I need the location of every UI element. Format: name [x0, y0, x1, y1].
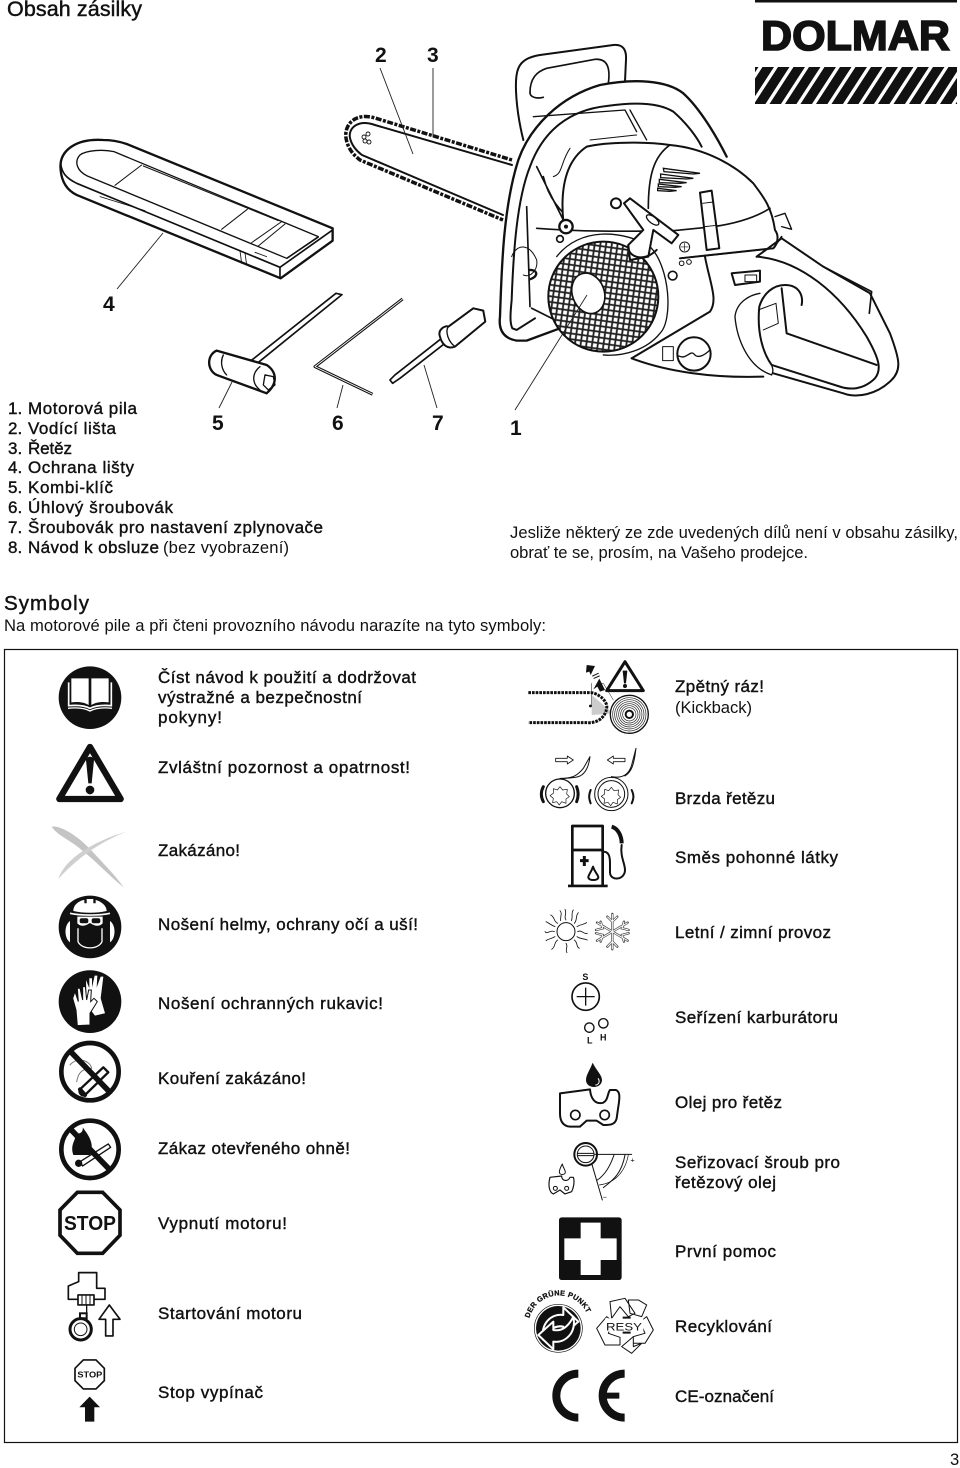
lower body	[632, 257, 714, 358]
rear handle	[757, 238, 898, 395]
icon: carburettor adjustment: H	[600, 1033, 606, 1043]
subheading: Na motorové pile a při čteni provozního návodu narazíte na tyto symboly:	[4, 616, 546, 635]
labels right column: Zpětný ráz!	[675, 677, 764, 696]
parts list: Řetěz	[28, 439, 72, 458]
icon: carburettor adjustment: L	[587, 1035, 593, 1045]
icon: summer and winter	[545, 909, 629, 953]
labels left column	[158, 668, 418, 1402]
callout numbers: 5	[212, 412, 224, 435]
icon: oil adjustment screw: +	[630, 1156, 635, 1165]
parts list: 3.	[8, 439, 22, 458]
icon: warning triangle	[59, 747, 121, 799]
parts list: 8.	[8, 538, 22, 557]
icon: resy recycling: RESY	[606, 1322, 643, 1334]
icon: resy recycling	[597, 1298, 653, 1353]
icon: carburettor adjustment: S	[582, 972, 588, 982]
callout numbers	[103, 44, 587, 440]
icon: oil adjustment screw: −	[603, 1192, 607, 1201]
labels left column: Zákaz otevřeného ohně!	[158, 1139, 350, 1158]
icon: chain oil	[560, 1063, 619, 1127]
labels right column: Seřízení karburátoru	[675, 1008, 838, 1027]
logo: DOLMAR	[755, 0, 957, 104]
labels left column: Startování motoru	[158, 1304, 302, 1323]
labels right column: Olej pro řetěz	[675, 1093, 782, 1112]
icon: combination wrench	[209, 293, 342, 393]
icon: ce mark	[556, 1374, 625, 1418]
parts list: Kombi-klíč	[28, 478, 114, 497]
icon: first aid	[559, 1217, 622, 1280]
icon: stop switch: STOP	[77, 1370, 103, 1380]
callout numbers: 3	[427, 44, 439, 67]
panel: symbols	[4, 648, 958, 1444]
labels left column: pokyny!	[158, 708, 222, 727]
parts list: Úhlový šroubovák	[28, 498, 174, 517]
labels right column: (Kickback)	[675, 698, 752, 717]
labels right column: První pomoc	[675, 1242, 776, 1261]
logo: DOLMAR: DOLMAR	[761, 12, 950, 59]
icon: carburettor screwdriver	[390, 308, 485, 383]
labels left column: výstražné a bezpečnostní	[158, 688, 362, 707]
note: Jesliže některý ze zde uvedených dílů není v obsahu zásilky,	[510, 523, 958, 542]
labels right column: Letní / zimní provoz	[675, 923, 831, 942]
parts list: (bez vyobrazení)	[163, 538, 289, 557]
labels left column: Kouření zakázáno!	[158, 1069, 306, 1088]
icon: der grüne punkt	[524, 1290, 592, 1353]
icons left column, upper	[52, 666, 126, 1033]
labels right column	[675, 677, 840, 1406]
icons right column, upper	[528, 662, 648, 1045]
parts list	[8, 399, 323, 557]
note: obrať te se, prosím, na Vašeho prodejce.	[510, 543, 808, 562]
labels left column: Nošení helmy, ochrany očí a uší!	[158, 915, 418, 934]
labels right column: CE-označení	[675, 1387, 774, 1406]
parts list: 1.	[8, 399, 22, 418]
icon: helmet and protection	[59, 896, 121, 958]
icons left column, lower	[60, 1043, 120, 1422]
parts list: 5.	[8, 478, 22, 497]
parts list: 4.	[8, 458, 22, 477]
icon: kickback	[528, 662, 648, 733]
parts list: 6.	[8, 498, 22, 517]
engine cover	[563, 143, 778, 258]
labels left column: Vypnutí motoru!	[158, 1214, 287, 1233]
parts list: Motorová pila	[28, 399, 138, 418]
labels right column: Recyklování	[675, 1317, 772, 1336]
fuel cap	[677, 337, 711, 371]
callout numbers: 1	[510, 417, 522, 440]
icons right column, lower	[524, 1062, 654, 1422]
icon: gloves	[59, 970, 121, 1033]
icon: scabbard	[60, 140, 333, 278]
heading: Symboly: Symboly	[4, 592, 90, 615]
starter mesh	[548, 242, 658, 352]
icon: stop switch	[75, 1360, 104, 1422]
parts list: Návod k obsluze	[28, 538, 159, 557]
callout numbers: 6	[332, 412, 344, 435]
icon: no smoking	[61, 1043, 119, 1100]
note	[510, 523, 958, 562]
parts list: Vodící lišta	[28, 419, 117, 438]
icon: prohibited cross	[52, 826, 126, 888]
labels right column: Seřizovací šroub pro	[675, 1153, 840, 1172]
labels right column: Brzda řetězu	[675, 789, 775, 808]
handlebar	[500, 81, 727, 341]
parts list: 2.	[8, 419, 22, 438]
callout numbers: 2	[375, 44, 387, 67]
labels left column: Zakázáno!	[158, 841, 240, 860]
starter handle	[624, 198, 678, 260]
labels left column: Stop vypínač	[158, 1383, 264, 1402]
icon: no open flame	[61, 1121, 119, 1178]
labels right column: Směs pohonné látky	[675, 848, 838, 867]
labels right column: řetězový olej	[675, 1173, 776, 1192]
icon: carburettor adjustment	[572, 972, 608, 1045]
icon: stop sign: STOP	[64, 1212, 116, 1235]
icon: chain brake	[541, 748, 636, 811]
labels left column: Zvláštní pozornost a opatrnost!	[158, 758, 410, 777]
parts list: 7.	[8, 518, 22, 537]
icon: starting engine	[68, 1273, 120, 1340]
callout numbers: 7	[432, 412, 444, 435]
icon: angled screwdriver	[315, 299, 403, 394]
icon: stop sign	[60, 1192, 120, 1253]
icon: chain guide bar and saw chain	[346, 116, 512, 220]
icon: chainsaw body	[500, 45, 898, 395]
callout numbers: 4	[103, 293, 115, 316]
parts list: Ochrana lišty	[28, 458, 134, 477]
icon: read manual	[59, 666, 121, 729]
labels left column: Číst návod k použití a dodržovat	[158, 668, 416, 687]
labels left column: Nošení ochranných rukavic!	[158, 994, 383, 1013]
icon: der grüne punkt: DER GRÜNE PUNKT	[524, 1290, 592, 1318]
icon: oil adjustment screw	[549, 1143, 635, 1201]
icon: fuel mix	[568, 826, 625, 886]
parts list: Šroubovák pro nastavení zplynovače	[28, 518, 323, 537]
